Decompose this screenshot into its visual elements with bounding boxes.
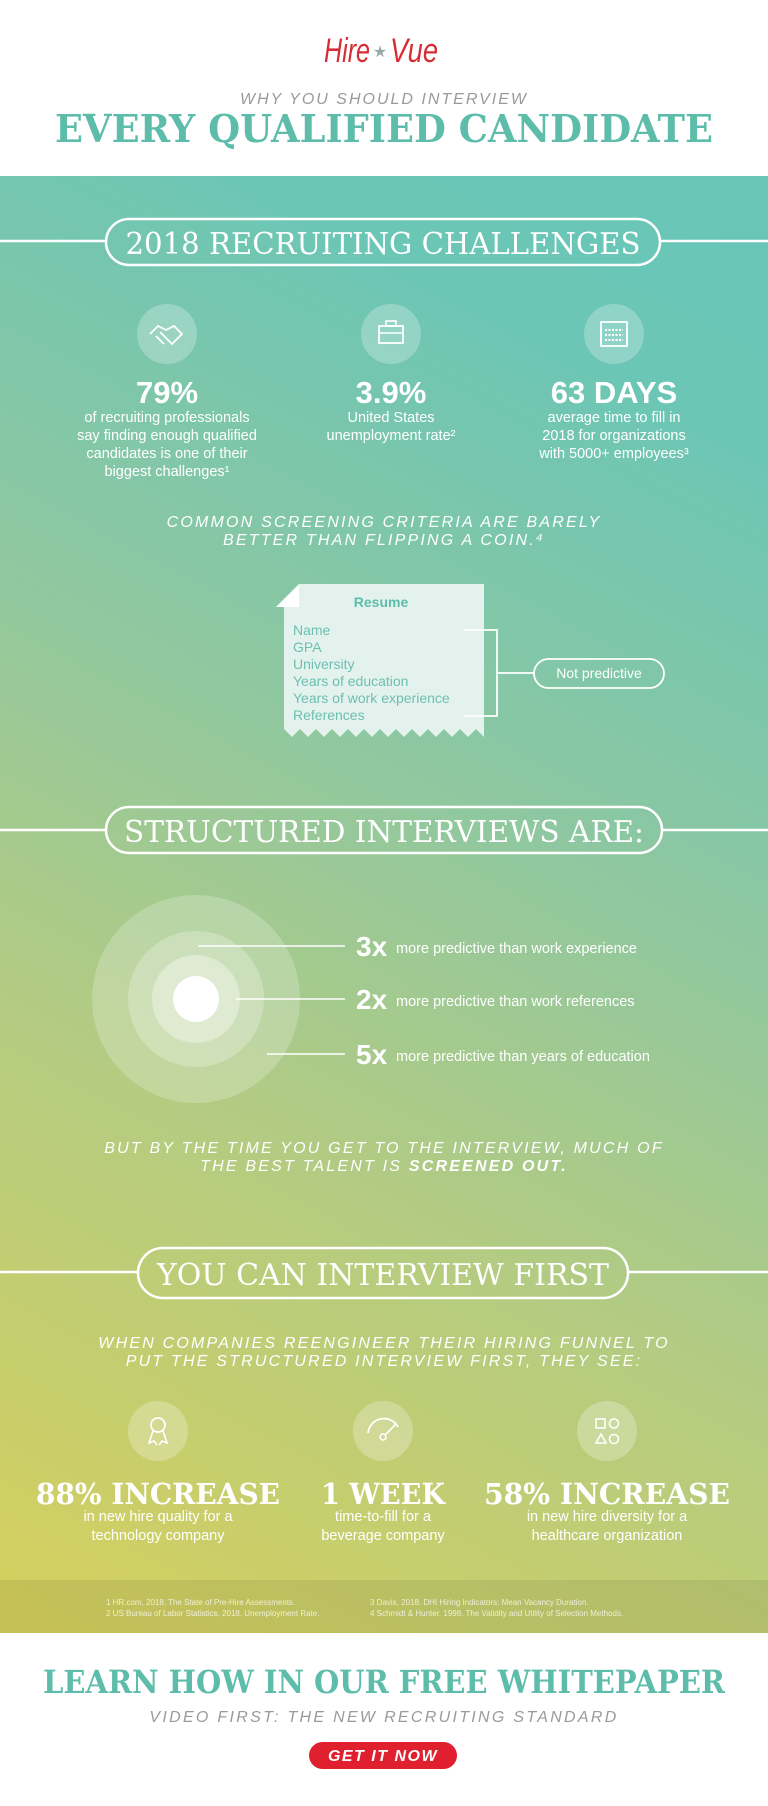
result: 88% [36, 1401, 280, 1544]
footnote band: 2 US Bureau of Labor Statistics, 2018. Unemployment Rate. [106, 1609, 319, 1618]
icon: shapes [577, 1401, 637, 1461]
callout: not predictive [534, 659, 664, 688]
result: 88%: in new hire quality for a [83, 1509, 233, 1525]
stat: 3.9%: United States [347, 410, 435, 426]
stat: 79%: biggest challenges¹ [105, 464, 230, 480]
footnote band: 3 Davis, 2018. DHI Hiring Indicators: Mean Vacancy Duration. [370, 1598, 589, 1607]
stat: 3.9% [327, 304, 456, 444]
callout: not predictive: Not predictive [556, 665, 642, 681]
heading pill: 2018 recruiting challenges [0, 219, 768, 265]
stat: 63 days: with 5000+ employees³ [538, 446, 689, 462]
resume card [276, 584, 484, 737]
subtitle: WHY YOU SHOULD INTERVIEW [240, 91, 528, 108]
icon: briefcase [361, 304, 421, 364]
stat: 63 days: 2018 for organizations [542, 428, 686, 444]
text: when companies [98, 1335, 670, 1370]
text: when companies: PUT THE STRUCTURED INTERVIEW FIRST, THEY SEE: [126, 1353, 642, 1370]
text: common screening criteria: BETTER THAN FLIPPING A COIN.⁴ [223, 532, 545, 549]
result: 58%: healthcare organization [532, 1528, 682, 1544]
button: get it now: GET IT NOW [328, 1748, 438, 1765]
stat: 63 days [538, 304, 689, 462]
stat lines: 2x [356, 984, 388, 1015]
heading pill: 2018 recruiting challenges: 2018 RECRUITING CHALLENGES [126, 227, 640, 262]
stat: 63 days: average time to fill in [548, 410, 680, 426]
text: common screening criteria: COMMON SCREENING CRITERIA ARE BARELY [167, 514, 601, 531]
stat lines: 5x [356, 1039, 388, 1070]
resume card: References [293, 707, 365, 723]
stat: 79%: say finding enough qualified [77, 428, 257, 444]
heading pill: structured interviews are: STRUCTURED INTERVIEWS ARE: [124, 815, 644, 850]
heading pill: you can interview first: YOU CAN INTERVIEW FIRST [156, 1258, 609, 1293]
result: 88%: 88% INCREASE [36, 1477, 280, 1511]
logo: Vue [390, 32, 438, 70]
stat: 63 days: 63 DAYS [551, 375, 677, 410]
stat: 3.9%: unemployment rate² [327, 428, 456, 444]
result: 88%: technology company [92, 1528, 225, 1544]
resume card: University [293, 656, 354, 672]
result: 1 week: time-to-fill for a [335, 1509, 432, 1525]
stat: 79%: 79% [136, 375, 198, 410]
resume card: Years of work experience [293, 690, 450, 706]
logo: ★ [373, 44, 387, 61]
text: screened out: BUT BY THE TIME YOU GET TO THE INTERVIEW, MUCH OF [104, 1140, 664, 1157]
result: 1 week: beverage company [321, 1528, 445, 1544]
stat lines: more predictive than work experience [396, 941, 637, 957]
logo: Hire [324, 32, 370, 70]
stat: 79%: of recruiting professionals [84, 410, 250, 426]
text: screened out: THE BEST TALENT IS SCREENED OUT. [200, 1158, 568, 1175]
text: when companies: WHEN COMPANIES REENGINEER THEIR HIRING FUNNEL TO [98, 1335, 670, 1352]
stat lines [198, 931, 650, 1070]
stat lines: more predictive than years of education [396, 1049, 650, 1065]
resume card: Years of education [293, 673, 408, 689]
cta subtitle: VIDEO FIRST: THE NEW RECRUITING STANDARD [149, 1709, 619, 1726]
result: 58% [484, 1401, 730, 1544]
result: 1 week [321, 1401, 447, 1544]
result: 58%: in new hire diversity for a [527, 1509, 688, 1525]
title: EVERY QUALIFIED CANDIDATE [55, 106, 713, 151]
resume card: GPA [293, 639, 322, 655]
icon: handshake [137, 304, 197, 364]
stat: 79%: candidates is one of their [86, 446, 248, 462]
heading pill: structured interviews are [0, 807, 768, 853]
stat: 79% [77, 304, 257, 480]
button: get it now [309, 1742, 457, 1769]
icon: speedometer [353, 1401, 413, 1461]
text: screened out [104, 1140, 664, 1175]
stat lines: 3x [356, 931, 388, 962]
bracket [464, 630, 534, 716]
result: 1 week: 1 WEEK [321, 1477, 447, 1511]
footnote band: 4 Schmidt & Hunter, 1998. The Validity and Utility of Selection Methods. [370, 1609, 623, 1618]
result: 58%: 58% INCREASE [484, 1477, 730, 1511]
stat: 3.9%: 3.9% [356, 375, 426, 410]
logo [324, 32, 438, 70]
footnote band [0, 1580, 768, 1633]
heading pill: you can interview first [0, 1248, 768, 1298]
footnote band: 1 HR.com, 2018. The State of Pre-Hire Assessments. [106, 1598, 295, 1607]
icon: calendar [584, 304, 644, 364]
text: common screening criteria [167, 514, 601, 549]
target circles [92, 895, 300, 1103]
resume card: Resume [354, 594, 408, 610]
stat lines: more predictive than work references [396, 994, 635, 1010]
resume card: Name [293, 622, 331, 638]
icon: award [128, 1401, 188, 1461]
